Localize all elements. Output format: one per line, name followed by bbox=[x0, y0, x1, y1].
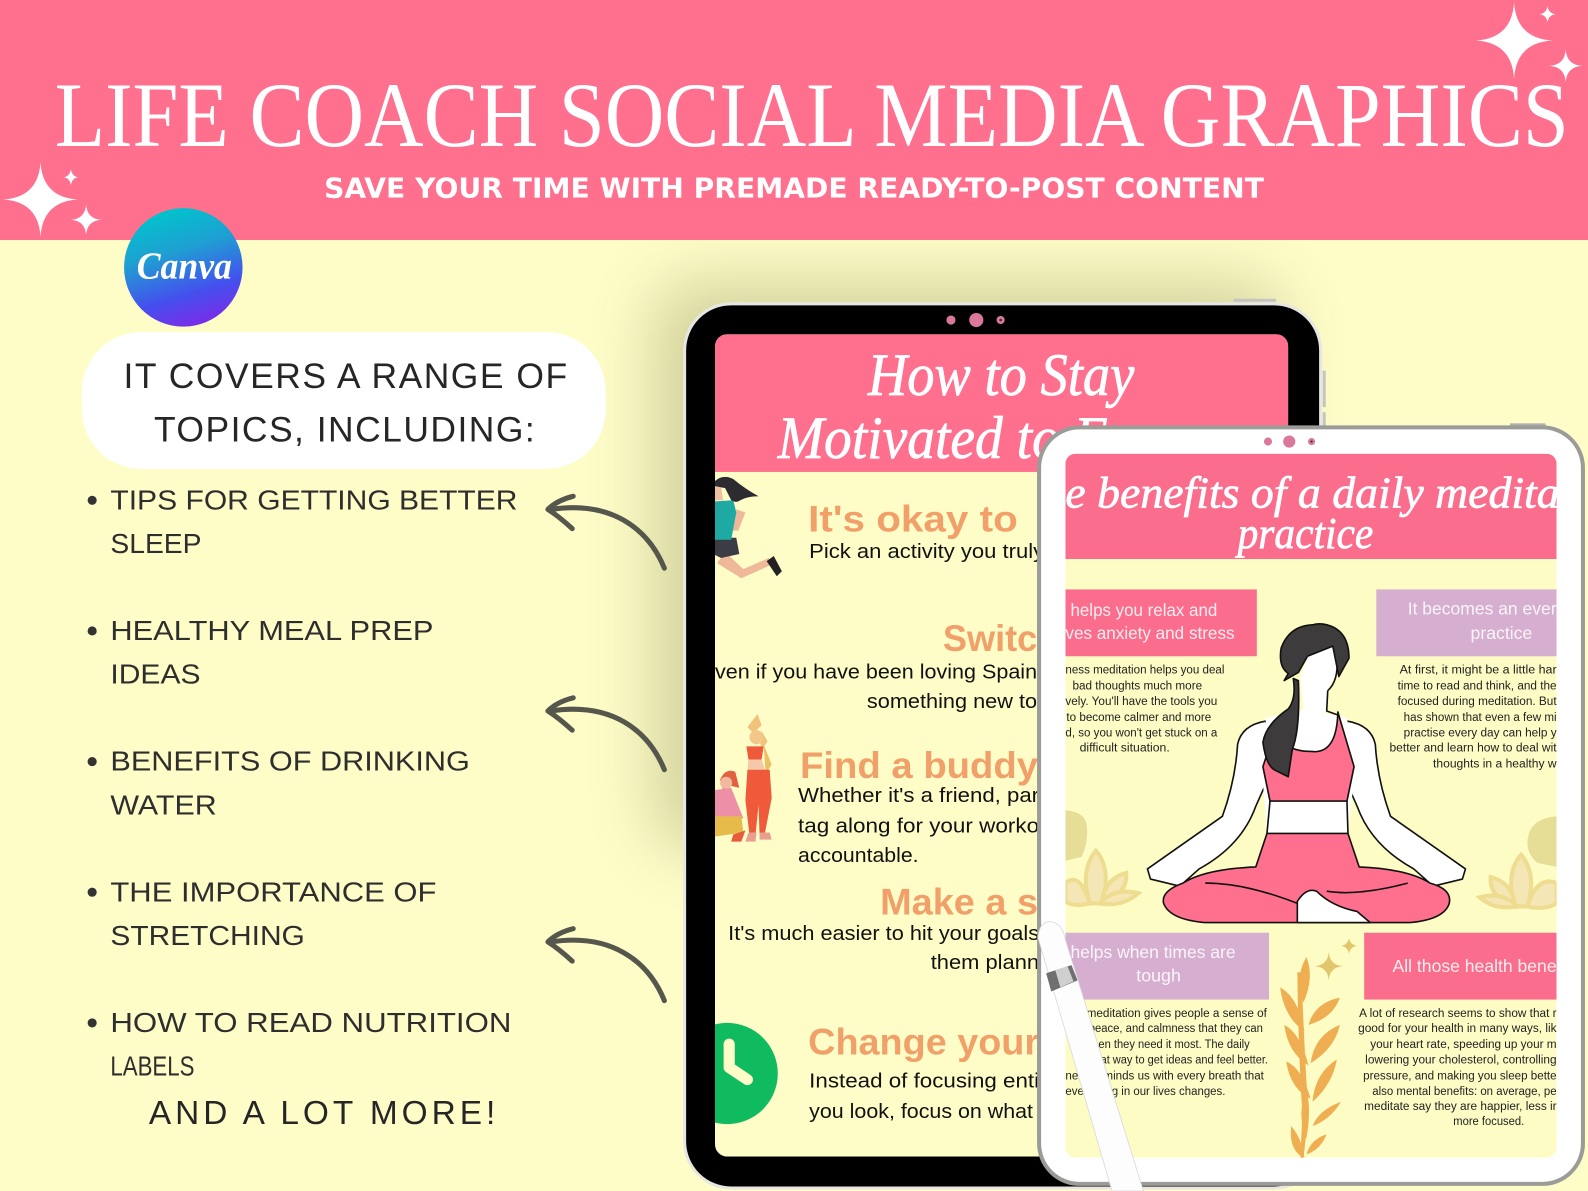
panel: black tablet bbox=[677, 299, 1326, 1188]
text: practice body: thoughts in a healthy w bbox=[1433, 758, 1557, 771]
text: health benefits body: more focused. bbox=[1453, 1115, 1524, 1128]
list item: drinking water: BENEFITS OF DRINKING bbox=[110, 746, 470, 777]
arrow: first bbox=[548, 496, 664, 568]
foot bbox=[1297, 890, 1370, 923]
pants and legs bbox=[1163, 833, 1450, 923]
screen heading band: Motivated to Ex bbox=[777, 405, 1132, 472]
tablet body bbox=[685, 304, 1321, 1188]
crop top bbox=[1263, 712, 1354, 801]
text: change body: Instead of focusing enti bbox=[809, 1071, 1039, 1093]
text: health benefits body: meditate say they are happier, less ir bbox=[1364, 1100, 1557, 1113]
text: practice body: At first, it might be a little har bbox=[1400, 663, 1557, 676]
list item: stretching: STRETCHING bbox=[110, 920, 305, 951]
face and neck bbox=[1300, 647, 1336, 713]
text: relax body: bad thoughts much more bbox=[1073, 680, 1202, 693]
text: health benefits body: your heart rate, speeding up your m bbox=[1370, 1038, 1557, 1051]
text: pick an activity: Pick an activity you truly bbox=[809, 541, 1045, 563]
heading: okay: It's okay to bbox=[808, 498, 1018, 540]
list item: sleep bbox=[88, 484, 518, 559]
text: relax body: vely. You'll have the tools you bbox=[1065, 695, 1217, 708]
header banner bbox=[0, 0, 1588, 240]
heading: schedule: Make a s bbox=[880, 881, 1038, 923]
tablet screen bbox=[1065, 454, 1560, 1159]
illustration: two women bbox=[715, 714, 772, 842]
waist bbox=[1267, 801, 1348, 833]
text: health benefits body bbox=[1358, 1007, 1557, 1128]
screen heading band: e benefits of a daily medita bbox=[1065, 467, 1560, 517]
screen heading band: practice bbox=[1235, 508, 1373, 558]
text: tough times body: it when they need it most. The daily bbox=[1076, 1038, 1250, 1051]
list item: meal prep bbox=[88, 615, 433, 690]
text: health benefits body: A lot of research seems to show that r bbox=[1359, 1007, 1557, 1020]
hair bbox=[1280, 624, 1349, 681]
text: relax body: d, so you won't get stuck on a bbox=[1065, 726, 1218, 739]
list item: meal prep: IDEAS bbox=[110, 659, 201, 690]
text: buddy body: accountable. bbox=[798, 845, 919, 867]
tablet screen bbox=[677, 334, 1288, 1157]
icon: sparkles right bbox=[1476, 2, 1582, 82]
text: relax body: difficult situation. bbox=[1080, 741, 1170, 754]
arms bbox=[1147, 721, 1272, 886]
screen heading band bbox=[1065, 454, 1560, 559]
text: change body: you look, focus on what bbox=[809, 1101, 1033, 1123]
text: tough times body: everything in our lives changes. bbox=[1065, 1085, 1225, 1098]
heading: buddy: Find a buddy bbox=[800, 744, 1038, 786]
icon: canva badge bbox=[124, 208, 243, 327]
heading: switch: Switch bbox=[943, 617, 1059, 659]
torso bbox=[1262, 709, 1355, 833]
text: spain: ven if you have been loving Spain bbox=[715, 662, 1037, 684]
illustration: runner bbox=[715, 477, 782, 578]
text: health benefits body: good for your health in many ways, lik bbox=[1358, 1022, 1557, 1035]
box: everyday practice bbox=[1376, 589, 1557, 656]
text: schedule body: It's much easier to hit your goals bbox=[728, 923, 1039, 945]
list item: sleep: TIPS FOR GETTING BETTER bbox=[110, 484, 518, 515]
text: schedule body bbox=[728, 923, 1039, 974]
list item: stretching bbox=[88, 876, 436, 951]
text: health benefits body: pressure, and making you sleep bette bbox=[1363, 1070, 1557, 1083]
box: tough times: tough bbox=[1136, 965, 1181, 985]
ponytail bbox=[1263, 679, 1299, 777]
box: tough times: helps when times are bbox=[1070, 942, 1236, 962]
text: practice body: practise every day can help y bbox=[1404, 726, 1557, 739]
box: everyday practice: practice bbox=[1471, 623, 1532, 643]
list item: nutrition labels bbox=[88, 1007, 511, 1082]
heading: change: Change your bbox=[808, 1020, 1039, 1062]
text: tough times body: meditation gives people a sense of bbox=[1087, 1007, 1268, 1020]
arrow: second bbox=[548, 698, 664, 770]
box: everyday practice: It becomes an ever bbox=[1408, 599, 1557, 619]
tablet body bbox=[1039, 427, 1583, 1184]
illustration: meditating woman bbox=[1147, 624, 1465, 923]
callout: topics heading pill: TOPICS, INCLUDING: bbox=[154, 410, 535, 450]
illustration: right lotus and stones bbox=[1480, 816, 1557, 908]
text: buddy body: tag along for your worko bbox=[798, 815, 1039, 837]
box: relax bbox=[1065, 589, 1257, 656]
text: health benefits body: also mental benefits: on average, pe bbox=[1372, 1085, 1557, 1098]
closing line: AND A LOT MORE! bbox=[149, 1095, 495, 1132]
icon: sparkles left bbox=[3, 162, 101, 237]
screen heading band: How to Stay bbox=[867, 342, 1134, 409]
box: health benefits: All those health bene bbox=[1393, 956, 1557, 976]
camera dots bbox=[946, 313, 1005, 327]
box: tough times bbox=[1065, 933, 1269, 1000]
callout: topics heading pill bbox=[82, 332, 606, 469]
list item: meal prep: HEALTHY MEAL PREP bbox=[110, 615, 433, 646]
text: relax body bbox=[1065, 663, 1224, 754]
list item: drinking water bbox=[88, 746, 470, 820]
text: buddy body: Whether it's a friend, par bbox=[798, 785, 1039, 807]
topic list bbox=[88, 484, 518, 1082]
tablet side buttons bbox=[1234, 299, 1326, 427]
text: spain bbox=[715, 662, 1037, 713]
box: health benefits bbox=[1364, 933, 1557, 1000]
illustration: wheat sprig bbox=[1280, 957, 1341, 1159]
screen heading band bbox=[715, 334, 1288, 472]
text: practice body: has shown that even a few mi bbox=[1404, 711, 1557, 724]
text: tough times body bbox=[1065, 1007, 1268, 1098]
icon: canva badge: Canva bbox=[137, 246, 232, 288]
icon: green clock bbox=[715, 1022, 778, 1124]
text: practice body: better and learn how to deal wit bbox=[1390, 741, 1557, 754]
callout: topics heading pill: IT COVERS A RANGE OF bbox=[124, 356, 567, 396]
text: practice body: focused during meditation. But bbox=[1398, 695, 1557, 708]
text: schedule body: them plann bbox=[931, 952, 1039, 974]
text: relax body: to become calmer and more bbox=[1066, 711, 1211, 724]
text: practice body bbox=[1390, 663, 1557, 771]
camera dots bbox=[1264, 435, 1315, 448]
text: tough times body: peace, and calmness that they can bbox=[1089, 1022, 1263, 1035]
icon: gold sparkles bbox=[1315, 938, 1357, 980]
text: tough times body: a great way to get ideas and feel better. bbox=[1076, 1053, 1268, 1066]
arrow: third bbox=[548, 929, 664, 1001]
tablet shadow bbox=[653, 282, 1281, 849]
list item: nutrition labels: HOW TO READ NUTRITION bbox=[110, 1007, 511, 1038]
subtitle: SAVE YOUR TIME WITH PREMADE READY-TO-POST CONTENT bbox=[324, 173, 1264, 204]
text: spain: something new to bbox=[867, 691, 1037, 713]
tablet top button bbox=[1510, 423, 1545, 427]
list item: drinking water: WATER bbox=[110, 789, 217, 820]
text: buddy body bbox=[798, 785, 1039, 867]
text: tough times body: ness reminds us with every breath that bbox=[1065, 1070, 1265, 1083]
list item: sleep: SLEEP bbox=[110, 528, 202, 559]
text: relax body: ness meditation helps you deal bbox=[1065, 663, 1224, 676]
box: relax: ves anxiety and stress bbox=[1065, 623, 1235, 643]
text: practice body: time to read and think, and the bbox=[1398, 680, 1557, 693]
panel: white tablet bbox=[1039, 423, 1583, 1184]
text: health benefits body: lowering your cholesterol, controlling bbox=[1365, 1053, 1557, 1066]
illustration: left lotus and stones bbox=[1065, 810, 1138, 905]
list item: nutrition labels: LABELS bbox=[110, 1051, 194, 1082]
text: change body bbox=[809, 1071, 1039, 1123]
list item: stretching: THE IMPORTANCE OF bbox=[110, 876, 436, 907]
stylus pencil bbox=[1038, 922, 1143, 1191]
box: relax: helps you relax and bbox=[1070, 600, 1217, 620]
